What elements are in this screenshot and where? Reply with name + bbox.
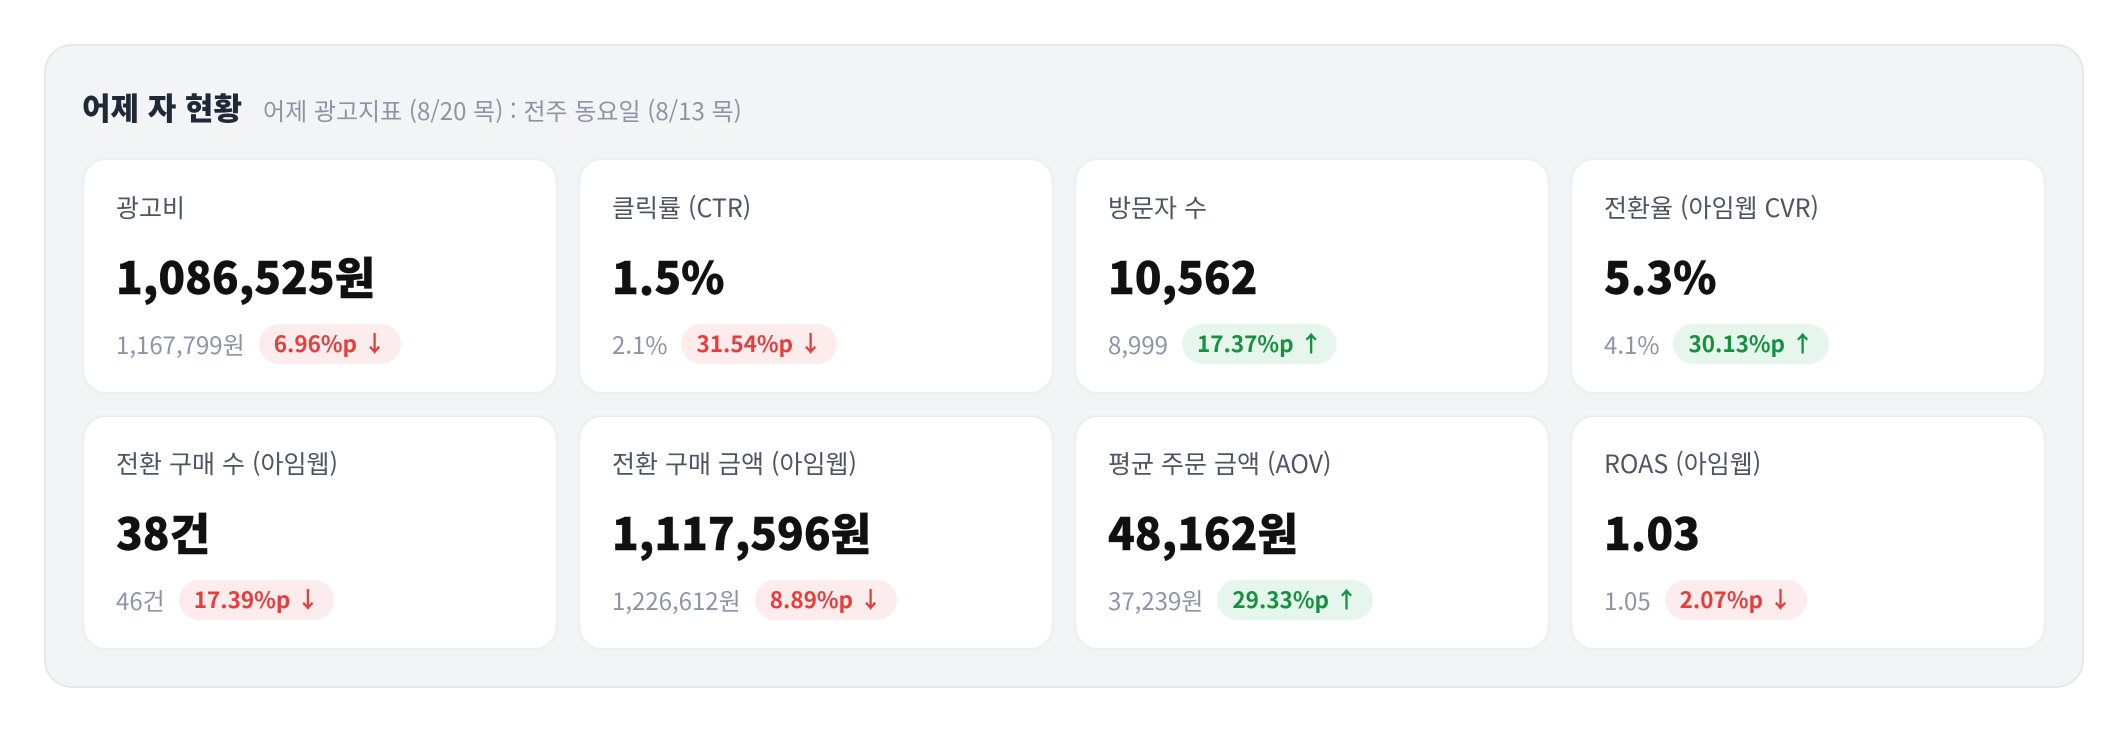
card: ad spend: 1,167,799원	[116, 326, 245, 361]
card: CVR	[1570, 158, 2046, 394]
card: CTR: 클릭률 (CTR)	[612, 189, 751, 225]
card: CVR: 30.13%p ↑	[1688, 327, 1814, 359]
card: visitors	[1074, 158, 1550, 394]
card: ROAS: 1.03	[1604, 499, 1700, 563]
card: CTR: 31.54%p ↓	[696, 327, 822, 359]
card: ad spend: 광고비	[116, 189, 185, 225]
card: ROAS: 1.05	[1604, 582, 1651, 617]
card: ad spend: 6.96%p ↓	[274, 327, 386, 359]
card: conversions: 38건	[116, 499, 210, 563]
card: AOV	[1074, 415, 1550, 650]
card: visitors: 방문자 수	[1108, 189, 1207, 225]
card: CVR: 5.3%	[1604, 243, 1717, 307]
card: conversions: 전환 구매 수 (아임웹)	[116, 445, 338, 481]
card: conversion revenue	[578, 415, 1054, 650]
card: conversions: 46건	[116, 582, 165, 617]
card: ad spend	[82, 158, 558, 394]
card: conversions: 17.39%p ↓	[194, 583, 319, 615]
card: visitors: 8,999	[1108, 326, 1168, 361]
card: conversions	[82, 415, 558, 650]
card: CTR	[578, 158, 1054, 394]
card: ROAS	[1570, 415, 2046, 650]
title: 어제 자 현황	[82, 84, 242, 129]
card: AOV: 평균 주문 금액 (AOV)	[1108, 445, 1331, 481]
card: conversion revenue: 전환 구매 금액 (아임웹)	[612, 445, 857, 481]
card: CTR: 1.5%	[612, 243, 725, 307]
card: conversion revenue: 1,117,596원	[612, 499, 871, 563]
card: visitors: 17.37%p ↑	[1197, 327, 1322, 359]
card: AOV: 29.33%p ↑	[1232, 583, 1358, 615]
card: visitors: 10,562	[1108, 243, 1258, 307]
subtitle: comparison dates: 어제 광고지표 (8/20 목) : 전주 동요일 (8/13 목)	[263, 92, 742, 127]
card: ROAS: ROAS (아임웹)	[1604, 445, 1761, 481]
card: ad spend: 1,086,525원	[116, 243, 375, 307]
card: ROAS: 2.07%p ↓	[1680, 583, 1792, 615]
card: CVR: 4.1%	[1604, 326, 1659, 361]
card: conversion revenue: 1,226,612원	[612, 582, 741, 617]
card: AOV: 48,162원	[1108, 499, 1298, 563]
card: AOV: 37,239원	[1108, 582, 1203, 617]
card: conversion revenue: 8.89%p ↓	[770, 583, 882, 615]
card: CTR: 2.1%	[612, 326, 667, 361]
card: CVR: 전환율 (아임웹 CVR)	[1604, 189, 1819, 225]
